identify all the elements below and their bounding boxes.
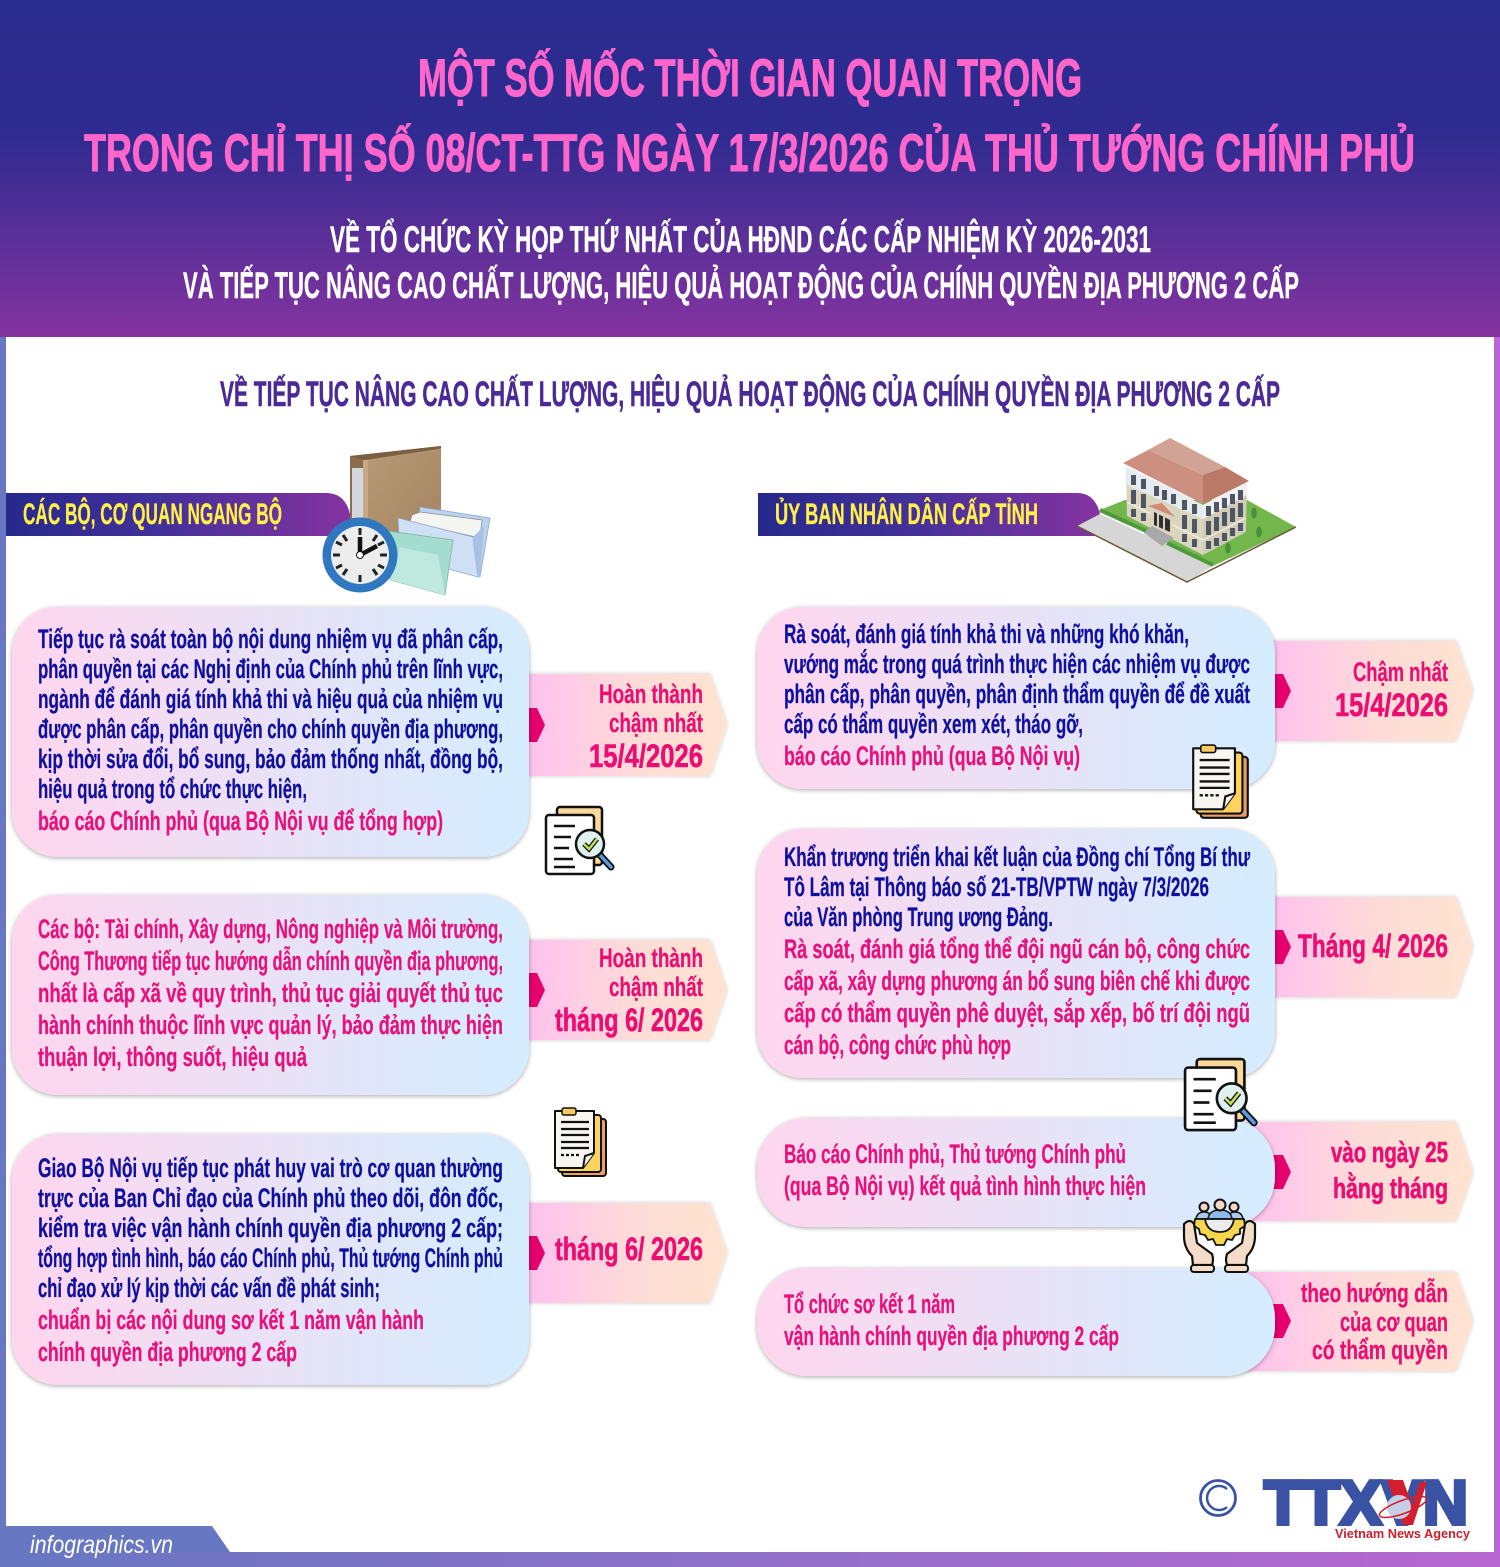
card 3: tổng hợp tình hình, báo cáo Chính phủ, Thủ tướng Chính phủ	[38, 1243, 503, 1273]
card 2: Rà soát, đánh giá tổng thể đội ngũ cán bộ, công chức	[784, 934, 1250, 964]
icon: stacked documents (right)	[1193, 745, 1248, 818]
card 4: vận hành chính quyền địa phương 2 cấp	[784, 1321, 1119, 1351]
deadline tag 3: vào ngày 25	[1331, 1137, 1448, 1169]
card 1: vướng mắc trong quá trình thực hiện các nhiệm vụ được	[784, 649, 1250, 679]
card 1: Rà soát, đánh giá tính khả thi và những khó khăn,	[784, 619, 1189, 649]
deadline tag 2: tháng 6/ 2026	[555, 1002, 703, 1038]
card 1: phân cấp, phân quyền, phân định thẩm quyền để đề xuất	[784, 679, 1250, 709]
card 1: Tiếp tục rà soát toàn bộ nội dung nhiệm vụ đã phân cấp,	[38, 624, 503, 654]
deadline tag 1: Hoàn thành	[599, 679, 703, 709]
deadline tag 2: Hoàn thành	[599, 943, 703, 973]
banner: ministries	[6, 493, 350, 536]
card 1: ngành để đánh giá tính khả thi và hiệu quả của nhiệm vụ	[38, 684, 503, 714]
card 2: hành chính thuộc lĩnh vực quản lý, bảo đảm thực hiện	[38, 1010, 503, 1040]
deadline tag 4: có thẩm quyền	[1312, 1335, 1448, 1365]
deadline tag 4: theo hướng dẫn	[1301, 1278, 1448, 1308]
icon: team, gear and hands	[1184, 1200, 1255, 1272]
icon: provincial building	[1077, 438, 1296, 582]
card 3	[757, 1118, 1275, 1227]
card 2: thuận lợi, thông suốt, hiệu quả	[38, 1042, 307, 1072]
header band	[0, 0, 1500, 337]
icon: binder, folders and clock	[322, 446, 490, 595]
icon: stacked documents (left)	[555, 1108, 606, 1176]
card 1: phân quyền tại các Nghị định của Chính phủ trên lĩnh vực,	[38, 654, 503, 684]
title	[84, 47, 1415, 183]
card 1: cấp có thẩm quyền xem xét, tháo gỡ,	[784, 709, 1083, 739]
panel: left column	[12, 607, 727, 1385]
deadline tag 3: hằng tháng	[1333, 1171, 1448, 1205]
card 4	[757, 1268, 1275, 1376]
card 2: cấp xã, xây dựng phương án bổ sung biên chế khi được	[784, 966, 1250, 996]
card 3: Báo cáo Chính phủ, Thủ tướng Chính phủ	[784, 1139, 1126, 1169]
card 2: của Văn phòng Trung ương Đảng.	[784, 902, 1053, 932]
card 1	[12, 607, 529, 857]
deadline tag 3	[520, 1203, 727, 1303]
title: MỘT SỐ MỐC THỜI GIAN QUAN TRỌNG	[418, 47, 1082, 108]
deadline tag 1	[520, 674, 727, 776]
card 1: báo cáo Chính phủ (qua Bộ Nội vụ)	[784, 741, 1080, 771]
frame: right strip	[1494, 337, 1500, 1567]
card 3	[12, 1134, 529, 1385]
footer tab: infographics.vn	[30, 1531, 173, 1559]
banner: provincial committees	[758, 493, 1100, 536]
card 3: chuẩn bị các nội dung sơ kết 1 năm vận hành	[38, 1305, 424, 1335]
card 2: Khẩn trương triển khai kết luận của Đồng chí Tổng Bí thư	[784, 842, 1251, 872]
deadline tag 4	[1240, 1272, 1473, 1371]
card 1: được phân cấp, phân quyền cho chính quyền địa phương,	[38, 714, 503, 744]
card 3: chính quyền địa phương 2 cấp	[38, 1337, 297, 1367]
card 1	[757, 607, 1275, 789]
icon: document with magnifier (left)	[546, 807, 611, 874]
card 3: kiểm tra việc vận hành chính quyền địa phương 2 cấp;	[38, 1213, 503, 1243]
card 2: cấp có thẩm quyền phê duyệt, sắp xếp, bố trí đội ngũ	[784, 998, 1250, 1028]
deadline tag 3: tháng 6/ 2026	[555, 1231, 703, 1267]
card 1: kịp thời sửa đổi, bổ sung, bảo đảm thống nhất, đồng bộ,	[38, 744, 503, 774]
footer tab	[0, 1526, 230, 1559]
card 3: (qua Bộ Nội vụ) kết quả tình hình thực hiện	[784, 1171, 1146, 1201]
card 2: Công Thương tiếp tục hướng dẫn chính quyền địa phương,	[38, 946, 503, 976]
card 2	[757, 829, 1275, 1078]
deadline tag 4: của cơ quan	[1340, 1307, 1448, 1337]
card 1: báo cáo Chính phủ (qua Bộ Nội vụ để tổng hợp)	[38, 806, 443, 836]
card 2: nhất là cấp xã về quy trình, thủ tục giải quyết thủ tục	[38, 978, 503, 1008]
deadline tag 1: Chậm nhất	[1353, 657, 1448, 687]
logo: copyright mark	[1200, 1480, 1236, 1516]
frame: left strip	[0, 337, 6, 1567]
card 2: Tô Lâm tại Thông báo số 21-TB/VPTW ngày 7/3/2026	[784, 872, 1209, 902]
card 3: Giao Bộ Nội vụ tiếp tục phát huy vai trò cơ quan thường	[38, 1153, 503, 1183]
card 4: Tổ chức sơ kết 1 năm	[784, 1289, 955, 1319]
panel: right column	[757, 607, 1473, 1376]
deadline tag 1: chậm nhất	[609, 708, 703, 738]
logo: TTXVN: Vietnam News Agency	[1335, 1526, 1471, 1541]
frame: bottom strip	[0, 1552, 1500, 1567]
card 2	[12, 895, 529, 1095]
card 1: hiệu quả trong tổ chức thực hiện,	[38, 774, 307, 804]
deadline tag 1: 15/4/2026	[1335, 687, 1448, 723]
banner: provincial committees: ỦY BAN NHÂN DÂN CẤP TỈNH	[775, 497, 1038, 531]
card 3: chỉ đạo xử lý kịp thời các vấn đề phát sinh;	[38, 1273, 380, 1303]
deadline tag 1: 15/4/2026	[589, 738, 703, 774]
card 2: cán bộ, công chức phù hợp	[784, 1030, 1011, 1060]
card 2: Các bộ: Tài chính, Xây dựng, Nông nghiệp và Môi trường,	[38, 914, 503, 944]
logo: TTXVN: TTXVN	[1264, 1469, 1468, 1538]
banner: ministries: CÁC BỘ, CƠ QUAN NGANG BỘ	[23, 497, 282, 531]
deadline tag 2	[520, 940, 727, 1040]
card 3: trực của Ban Chỉ đạo của Chính phủ theo dõi, đôn đốc,	[38, 1183, 503, 1213]
deadline tag 2	[1265, 897, 1473, 997]
icon: document with magnifier (right)	[1185, 1059, 1254, 1130]
deadline tag 3	[1240, 1122, 1473, 1221]
subtitle	[183, 217, 1299, 306]
deadline tag 2: chậm nhất	[609, 972, 703, 1002]
deadline tag 1	[1265, 641, 1473, 741]
